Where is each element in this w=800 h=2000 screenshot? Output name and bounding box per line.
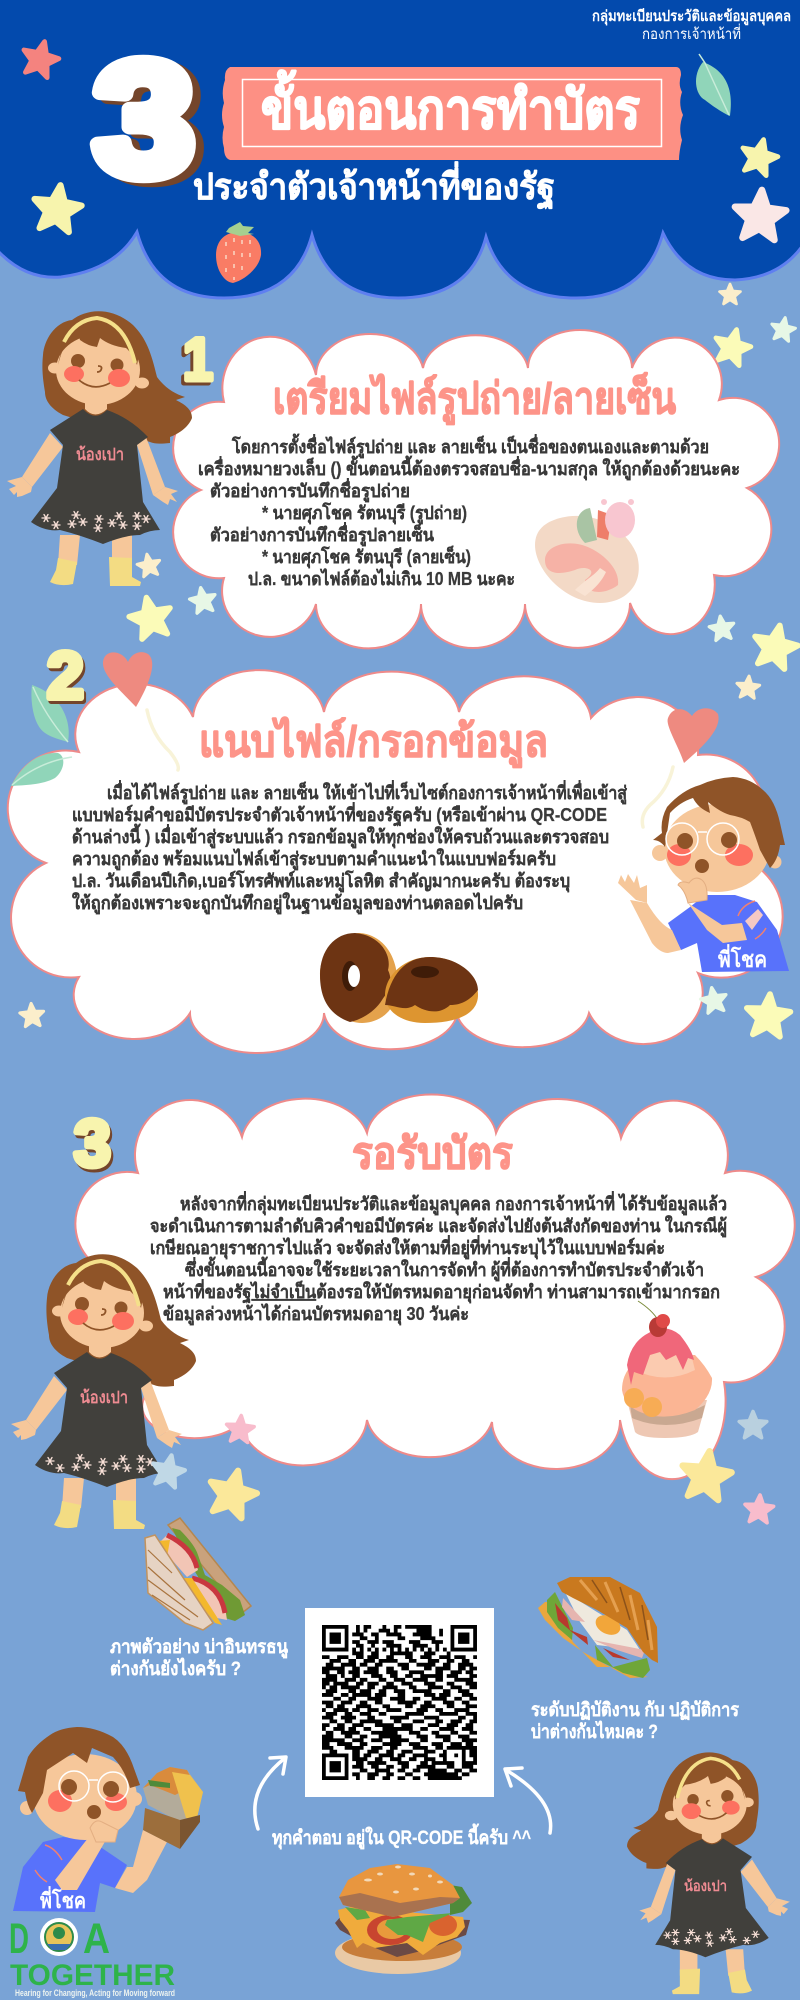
icon: yellow star right: [738, 135, 781, 177]
question: left: ภาพตัวอย่าง บ่าอินทรธนู: [110, 1637, 288, 1659]
icon: cake roll with bear: [535, 499, 639, 603]
text block: step 1: ป.ล. ขนาดไฟล์ต้องไม่เกิน 10 MB นะคะ: [248, 568, 515, 589]
icon: pink star: [19, 37, 62, 79]
text block: step 3: ข้อมูลล่วงหน้าได้ก่อนบัตรหมดอายุ 30 วันค่ะ: [163, 1303, 469, 1326]
big number 3: 3: [94, 29, 194, 208]
text block: step 2: แบบฟอร์มคำขอมีบัตรประจำตัวเจ้าหน้าที่ของรัฐครับ (หรือเข้าผ่าน QR-CODE: [72, 802, 607, 827]
icon: blue star: [739, 1412, 767, 1438]
heading: step 2: แนบไฟล์/กรอกข้อมูล: [199, 716, 548, 768]
icon: leaf upper: [31, 685, 69, 742]
question: left: ต่างกันยังไงครับ ?: [110, 1657, 241, 1680]
panel: step 3 cloud: [75, 1094, 795, 1479]
step number 2: 2: [47, 638, 84, 712]
character: girl 3 mirrored: [627, 1752, 790, 1994]
icon: donut left: [320, 933, 397, 1023]
text block: step 1: * นายศุภโชค รัตนบุรี (รูปถ่าย): [262, 502, 467, 525]
icon: heart with streamer right: [642, 708, 719, 827]
character: girl 2: [11, 1254, 196, 1529]
icon: yellow star: [31, 182, 84, 233]
arrow: left to QR: [255, 1757, 286, 1829]
icon: strawberry: [216, 222, 261, 283]
icon: leaf: [696, 54, 731, 116]
icon: yellow star: [679, 1448, 734, 1501]
icon: cream star: [720, 284, 740, 304]
icon: mint star: [708, 614, 736, 641]
character: boy pi-chok: พี่โชค: [718, 943, 767, 972]
character: girl 1: [7, 311, 192, 586]
question: right: บ่าต่างกันไหมคะ ?: [531, 1720, 658, 1743]
text block: step 1: * นายศุภโชค รัตนบุรี (ลายเซ็น): [262, 545, 471, 569]
text block: step 3: [150, 1191, 727, 1326]
icon: mint star: [699, 985, 729, 1014]
text block: step 1: ตัวอย่างการบันทึกชื่อรูปลายเซ็น: [210, 522, 435, 547]
text block: step 1: เครื่องหมายวงเล็บ () ขั้นตอนนี้ต้องตรวจสอบชื่อ-นามสกุล ให้ถูกต้องด้วยนะคะ: [198, 455, 740, 481]
icon: mint star: [188, 585, 218, 614]
organisation credit: [592, 7, 791, 43]
character: boy pi-chok: [618, 777, 789, 972]
step number 1: 1: [180, 329, 210, 396]
icon: yellow star: [745, 992, 792, 1037]
step number 1: 1: [183, 326, 213, 393]
icon: burger: [335, 1864, 472, 1974]
icon: pink star: [225, 1414, 255, 1443]
organisation credit: กองการเจ้าหน้าที่: [642, 23, 741, 43]
character: girl 2: น้องเปา: [80, 1388, 128, 1407]
arrow: right to QR: [505, 1768, 551, 1833]
title banner: ขั้นตอนการทำบัตร: [261, 70, 640, 140]
icon: cupcake with cherry: [622, 1301, 712, 1438]
heading: step 3: รอรับบัตร: [352, 1130, 513, 1178]
text block: step 2: ให้ถูกต้องเพราะจะถูกบันทึกอยู่ในฐานข้อมูลของท่านตลอดไปครับ: [72, 892, 523, 915]
QR code: [305, 1608, 494, 1797]
text block: step 3: เกษียณอายุราชการไปแล้ว จะจัดส่งให้ตามที่อยู่ที่ท่านระบุไว้ในแบบฟอร์มค่ะ: [150, 1235, 665, 1260]
logo: DOA Together: TOGETHER: [10, 1959, 175, 1992]
icon: cream star: [136, 552, 162, 578]
character: boy with sandwich: [13, 1727, 203, 1913]
icon: croissant sandwich: [538, 1577, 658, 1678]
icon: mint star top: [770, 316, 797, 342]
text block: step 3: หลังจากที่กลุ่มทะเบียนประวัติและข้อมูลบุคคล กองการเจ้าหน้าที่ ได้รับข้อมูลแล้ว: [180, 1191, 727, 1216]
question: left: [110, 1637, 288, 1680]
step number 2: 2: [49, 641, 86, 715]
text block: step 2: ด้านล่างนี้ ) เมื่อเข้าสู่ระบบแล้ว กรอกข้อมูลให้ทุกช่องให้ครบถ้วนและตรวจสอบ: [72, 823, 609, 849]
icon: cream star: [19, 1003, 45, 1027]
logo: DOA Together: [9, 1915, 175, 1998]
character: girl 3 mirrored: น้องเปา: [684, 1878, 727, 1895]
icon: donut right: [385, 957, 478, 1023]
panel: step 2 cloud: [8, 670, 783, 1053]
icon: yellow star: [750, 621, 800, 671]
icon: yellow star: [204, 1465, 261, 1520]
step number 3: 3: [76, 1109, 113, 1183]
step number 3: 3: [74, 1106, 111, 1180]
icon: pink star: [744, 1494, 774, 1523]
text block: step 2: ป.ล. วันเดือนปีเกิด,เบอร์โทรศัพท์และหมู่โลหิต สำคัญมากนะครับ ต้องระบุ: [72, 870, 570, 893]
character: boy with sandwich: พี่โชค: [40, 1885, 86, 1913]
logo: DOA Together: A: [83, 1915, 110, 1963]
icon: leaf lower: [11, 753, 72, 786]
icon: yellow star: [126, 593, 175, 641]
panel: step 1 cloud: [173, 330, 779, 648]
heading: step 1: เตรียมไฟล์รูปถ่าย/ลายเซ็น: [273, 372, 677, 425]
icon: blue star: [149, 1452, 187, 1489]
text block: step 1: [198, 433, 740, 589]
text block: step 3: จะดำเนินการตามลำดับคิวคำขอมีบัตรค่ะ และจัดส่งไปยังต้นสังกัดของท่าน ในกรณีผู้: [150, 1215, 727, 1238]
icon: heart with streamer: [103, 652, 178, 770]
text block: step 2: เมื่อได้ไฟล์รูปถ่าย และ ลายเซ็น ให้เข้าไปที่เว็บไซต์กองการเจ้าหน้าที่เพื่อเข้าสู่: [107, 780, 628, 805]
icon: sandwich: [145, 1518, 251, 1630]
text block: step 3: หน้าที่ของรัฐไม่จำเป็นต้องรอให้บัตรหมดอายุก่อนจัดทำ ท่านสามารถเข้ามากรอก: [163, 1279, 720, 1304]
text block: step 2: [72, 780, 628, 915]
header band with scalloped edge: [0, 0, 800, 298]
caption: QR answer: ทุกคำตอบ อยู่ใน QR-CODE นี้ครับ ^^: [272, 1823, 531, 1850]
text block: step 2: ความถูกต้อง พร้อมแนบไฟล์เข้าสู่ระบบตามคำแนะนำในแบบฟอร์มครับ: [72, 848, 556, 871]
text block: step 1: โดยการตั้งชื่อไฟล์รูปถ่าย และ ลายเซ็น เป็นชื่อของตนเองและตามด้วย: [231, 433, 709, 459]
character: girl 1: น้องเปา: [76, 445, 124, 464]
icon: pale pink star: [733, 188, 787, 241]
text block: step 3: ซึ่งขั้นตอนนี้อาจจะใช้ระยะเวลาในการจัดทำ ผู้ที่ต้องการทำบัตรประจำตัวเจ้า: [185, 1256, 704, 1282]
icon: cream star: [736, 675, 760, 699]
logo: DOA Together: D: [9, 1915, 29, 1963]
logo: DOA Together: Hearing for Changing, Acting for Moving forward: [15, 1988, 175, 1998]
question: right: ระดับปฏิบัติงาน กับ ปฏิบัติการ: [531, 1700, 740, 1721]
big number 3: 3: [102, 33, 202, 212]
text block: step 1: ตัวอย่างการบันทึกชื่อรูปถ่าย: [210, 478, 410, 503]
icon: yellow star step 1: [711, 325, 754, 367]
title banner: [222, 67, 683, 160]
subtitle: ประจำตัวเจ้าหน้าที่ของรัฐ: [193, 161, 555, 210]
question: right: [531, 1700, 740, 1743]
